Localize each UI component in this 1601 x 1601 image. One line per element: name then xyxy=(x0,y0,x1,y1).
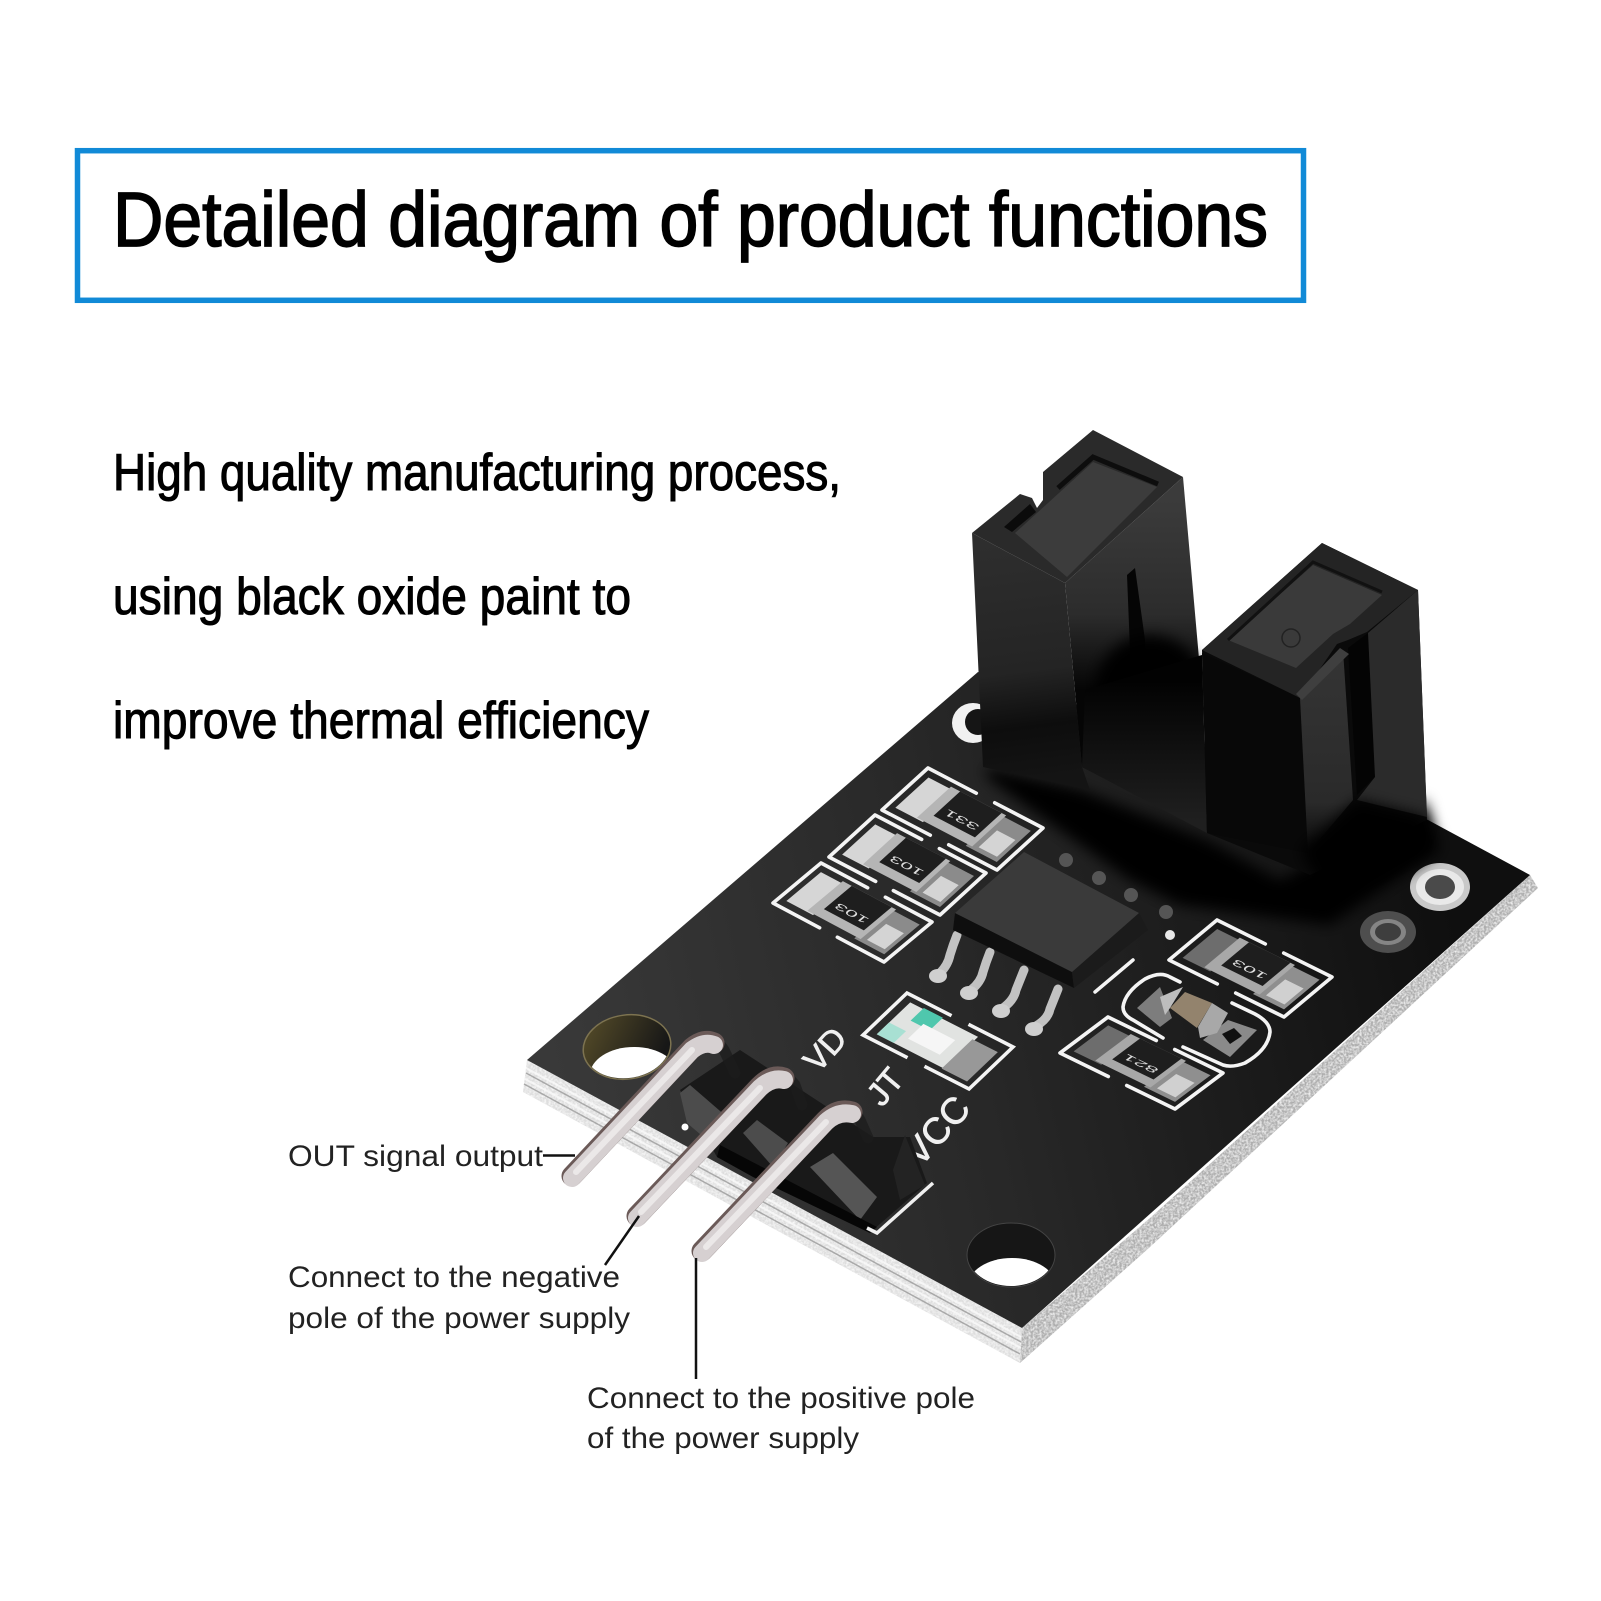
solder pad: lower xyxy=(1360,911,1416,953)
silkscreen pin names: VCC xyxy=(895,1088,978,1173)
callout: positive pole: of the power supply xyxy=(587,1422,859,1455)
resistor 821: 821 xyxy=(1120,1052,1162,1075)
callout: positive pole xyxy=(587,1258,975,1455)
resistor 331: 331 xyxy=(941,807,982,832)
left optical sensor xyxy=(972,430,1207,830)
resistor 821 xyxy=(1060,1017,1223,1109)
resistor 103 xyxy=(829,815,986,915)
right optical sensor xyxy=(1202,543,1427,905)
description text block: High quality manufacturing process, xyxy=(113,444,841,502)
callout: negative pole: pole of the power supply xyxy=(288,1302,630,1335)
mounting hole: front right xyxy=(966,1222,1056,1288)
description text block: improve thermal efficiency xyxy=(113,692,649,750)
callout: negative pole: Connect to the negative xyxy=(288,1261,620,1294)
callout: positive pole: Connect to the positive pole xyxy=(587,1382,975,1415)
resistor 331 xyxy=(882,768,1043,870)
resistor 103 lower: 103 xyxy=(831,901,872,925)
IC pins xyxy=(940,935,1058,1026)
silkscreen pin names: JT xyxy=(859,1061,911,1112)
product photo: sensor module xyxy=(523,430,1538,1363)
description text block xyxy=(113,444,841,750)
pin 1 xyxy=(572,1040,735,1178)
LED xyxy=(863,993,1013,1089)
resistor 103 right xyxy=(1169,920,1332,1017)
resistor 103: 103 xyxy=(887,853,927,878)
title text: Detailed diagram of product functions xyxy=(113,177,1268,263)
silkscreen pin names xyxy=(796,1020,978,1173)
sensor bridge wall xyxy=(1082,655,1207,833)
title box xyxy=(78,151,1304,300)
sensor shadow on board xyxy=(983,767,1440,925)
resistor 103 right: 103 xyxy=(1229,957,1271,981)
IC chip xyxy=(929,852,1175,1036)
circuit board top face xyxy=(527,672,1530,1328)
pin 2 xyxy=(637,1076,802,1218)
pin 3 xyxy=(702,1111,868,1253)
mounting hole: rear xyxy=(952,703,994,743)
circuit board edge xyxy=(523,875,1538,1363)
solder pad: upper xyxy=(1410,863,1470,911)
pin header xyxy=(680,1050,933,1233)
mounting hole: front left xyxy=(582,1014,672,1080)
callout: negative pole xyxy=(288,1216,639,1335)
description text block: using black oxide paint to xyxy=(113,568,631,626)
silkscreen pin names: VD xyxy=(796,1020,854,1079)
callout: OUT signal output: OUT signal output xyxy=(288,1140,544,1173)
resistor 103 lower xyxy=(773,863,932,962)
capacitor xyxy=(1123,974,1270,1066)
